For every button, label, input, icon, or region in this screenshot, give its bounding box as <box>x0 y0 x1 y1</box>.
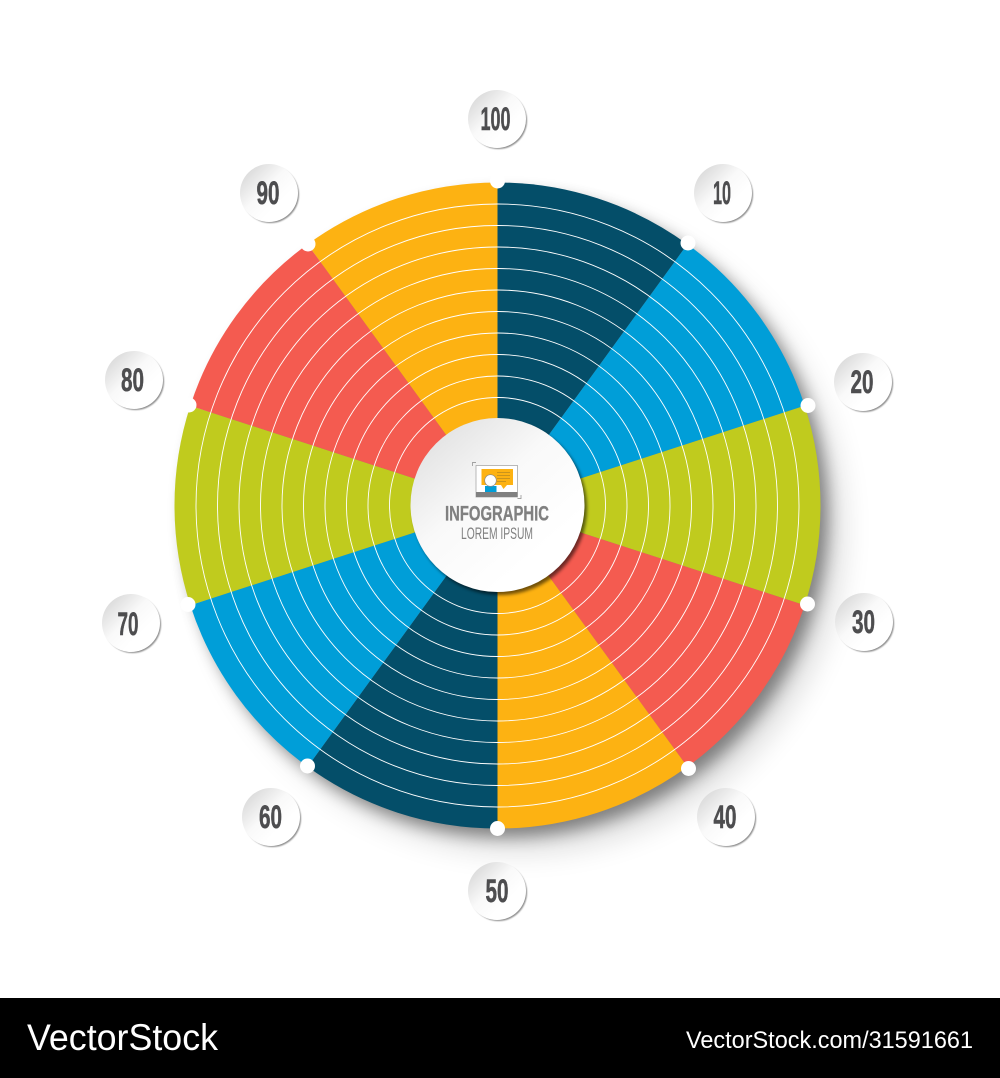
label badge 90 <box>240 164 299 223</box>
footer watermark bar <box>0 998 1000 1078</box>
wheel drop shadow <box>184 193 842 851</box>
label badge 70: 70 <box>118 606 138 642</box>
sector 0-10 <box>498 182 687 506</box>
label badge 100 <box>468 90 527 149</box>
label badge 30 <box>835 593 894 652</box>
label badge 40 <box>697 788 756 847</box>
label badge 10: 10 <box>713 175 731 211</box>
label badge 80: 80 <box>121 362 144 398</box>
image reference: VectorStock.com/31591661 <box>686 1027 973 1054</box>
label badge 60 <box>242 788 301 847</box>
sector 60-70 <box>190 506 498 767</box>
label badge 60: 60 <box>259 799 282 835</box>
hub subtitle: LOREM IPSUM <box>461 524 533 543</box>
concentric ring lines <box>196 204 799 807</box>
label badge 10 <box>694 164 753 223</box>
icon: presenter on laptop screen <box>472 462 521 498</box>
label badge 50: 50 <box>486 873 508 909</box>
label badge 50 <box>468 862 527 921</box>
label badge 20 <box>834 353 893 412</box>
sector 20-30 <box>498 406 821 605</box>
brand name: VectorStock <box>27 1017 218 1058</box>
label badge 80 <box>105 351 164 410</box>
label badge 70 <box>102 594 161 653</box>
sector 40-50 <box>498 506 687 828</box>
label badge 40: 40 <box>714 799 736 835</box>
sector 10-20 <box>498 244 805 505</box>
sector 90-100 <box>308 182 498 506</box>
hub title: INFOGRAPHIC <box>445 502 549 526</box>
rim marker dots <box>180 174 816 836</box>
central hub <box>410 418 587 595</box>
label badge 90: 90 <box>256 175 280 211</box>
hub disc <box>410 418 584 592</box>
label badge 30: 30 <box>852 604 875 640</box>
sector 80-90 <box>190 244 498 505</box>
label badge 100: 100 <box>480 101 510 137</box>
label badge 20: 20 <box>850 364 874 400</box>
sector 70-80 <box>174 406 498 605</box>
sector 30-40 <box>498 506 805 767</box>
hub shadow <box>413 421 587 595</box>
wheel chart: ten coloured sectors <box>174 182 821 828</box>
sector 50-60 <box>308 506 498 828</box>
